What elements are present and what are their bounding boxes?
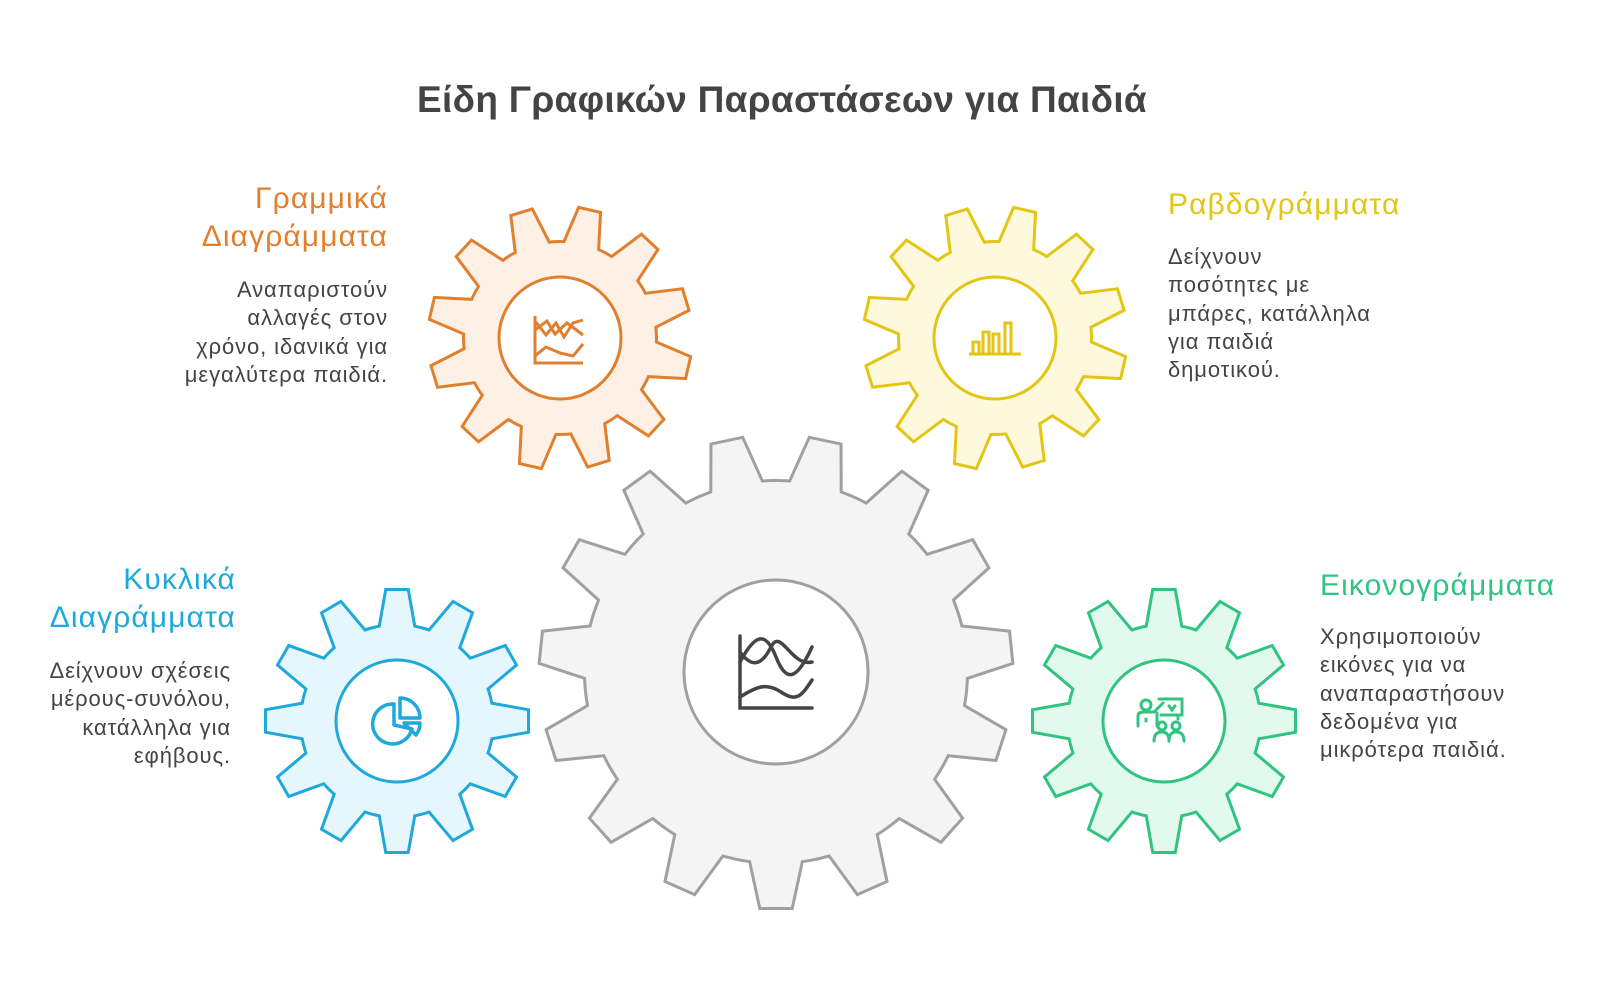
title: Είδη Γραφικών Παραστάσεων για Παιδιά: [417, 79, 1147, 120]
text: green: [1320, 624, 1507, 762]
text: yellow: δημοτικού.: [1168, 357, 1281, 382]
text: yellow: Δείχνουν: [1168, 244, 1262, 269]
gear: yellow: [839, 182, 1151, 494]
text: orange: Αναπαριστούν: [237, 277, 388, 302]
text: yellow: μπάρες, κατάλληλα: [1168, 301, 1371, 326]
heading: orange: Διαγράμματα: [202, 220, 388, 252]
text: orange: χρόνο, ιδανικά για: [196, 334, 388, 359]
text: blue: εφήβους.: [134, 743, 231, 768]
heading: orange: [202, 182, 388, 252]
text: green: Χρησιμοποιούν: [1320, 624, 1481, 649]
text: orange: [185, 277, 388, 387]
icon: line chart: [535, 316, 583, 363]
heading: orange: Γραμμικά: [255, 182, 388, 215]
text: green: εικόνες για να: [1320, 652, 1466, 677]
icon: teacher with students: [1138, 699, 1184, 741]
text: blue: [49, 658, 231, 768]
text: yellow: ποσότητες με: [1168, 272, 1310, 297]
text: blue: Δείχνουν σχέσεις: [49, 658, 231, 683]
gear: orange: [404, 182, 716, 494]
gear: blue: [267, 591, 527, 851]
heading: yellow: Ραβδογράμματα: [1168, 188, 1400, 221]
text: orange: μεγαλύτερα παιδιά.: [185, 362, 388, 387]
heading: blue: Διαγράμματα: [50, 600, 236, 634]
gear: green: [1034, 591, 1294, 851]
text: yellow: για παιδιά: [1168, 329, 1274, 354]
icon: pie chart: [373, 698, 420, 744]
heading: blue: Κυκλικά: [123, 563, 236, 596]
text: orange: αλλαγές στον: [247, 305, 388, 330]
text: yellow: [1168, 244, 1371, 382]
text: green: δεδομένα για: [1320, 709, 1458, 734]
icon: line chart center: [740, 636, 812, 708]
icon: bar chart: [969, 323, 1021, 354]
text: blue: μέρους-συνόλου,: [51, 686, 231, 711]
text: blue: κατάλληλα για: [82, 715, 231, 740]
heading: green: Εικονογράμματα: [1320, 569, 1555, 602]
text: green: μικρότερα παιδιά.: [1320, 737, 1507, 762]
text: green: αναπαραστήσουν: [1320, 681, 1505, 706]
gear: big gray: [496, 393, 1056, 952]
heading: blue: [50, 563, 236, 634]
